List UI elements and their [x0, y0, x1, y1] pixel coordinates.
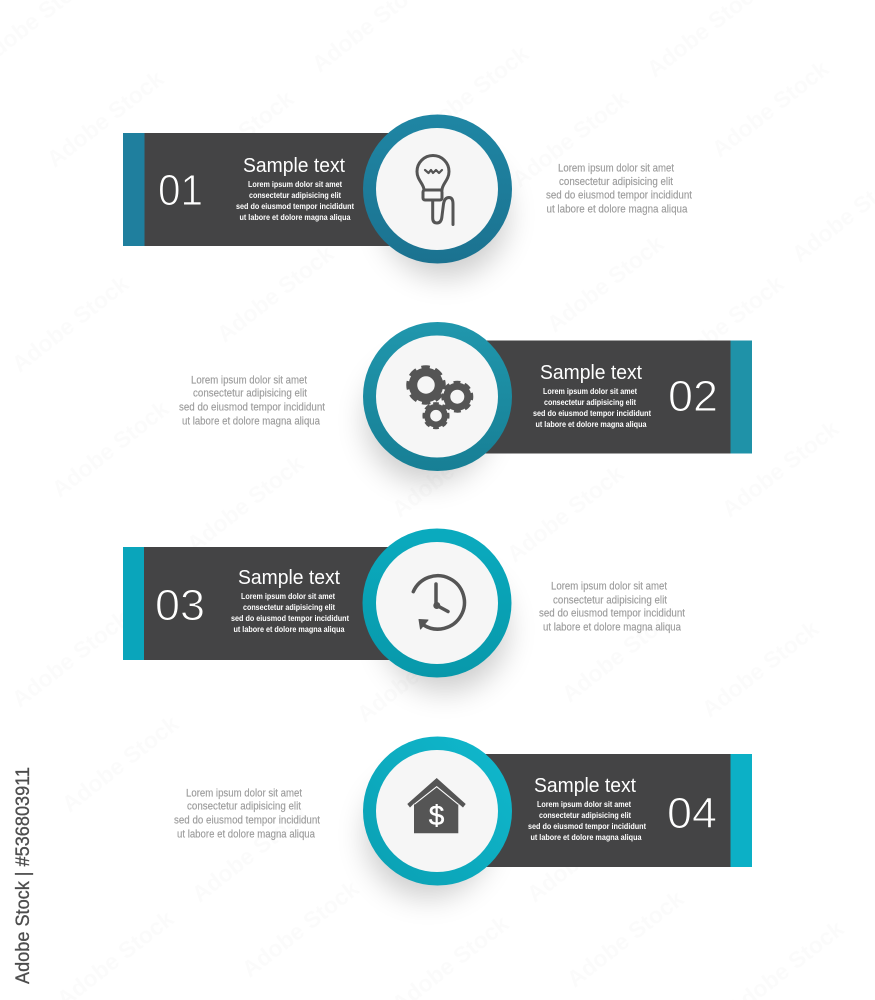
accent strip 04	[730, 754, 752, 867]
side text 03: consectetur adipisicing elit	[553, 594, 667, 606]
panel: step 04	[174, 736, 752, 897]
number 02: 02	[668, 372, 718, 421]
heading 02: Sample text	[540, 362, 642, 384]
infographic canvas: Adobe Stock	[387, 415, 514, 522]
icon: house with dollar	[407, 778, 466, 833]
accent strip 03	[123, 547, 144, 660]
bar text 01: ut labore et dolore magna aliqua	[240, 212, 351, 222]
bar 04	[482, 754, 731, 867]
side text 04: sed do eiusmod tempor incididunt	[174, 814, 320, 826]
infographic canvas: Adobe Stock	[717, 415, 844, 522]
accent strip 02	[730, 340, 752, 454]
stock id label: Adobe Stock | #536803911	[13, 767, 34, 984]
infographic canvas: Adobe Stock	[507, 85, 634, 192]
bar text 02: sed do eiusmod tempor incididunt	[533, 408, 651, 418]
icon: house with dollar: $	[429, 800, 445, 831]
side text 01: sed do eiusmod tempor incididunt	[546, 190, 692, 202]
number 04: 04	[667, 789, 717, 838]
infographic canvas: Adobe Stock	[542, 230, 669, 337]
inner disc 02	[376, 336, 498, 458]
infographic canvas: Adobe Stock	[7, 605, 134, 712]
bar text 03: consectetur adipisicing elit	[243, 602, 335, 612]
side text 01: consectetur adipisicing elit	[559, 176, 673, 188]
ring 04	[363, 736, 512, 886]
inner disc 01	[376, 128, 498, 250]
side text 03: sed do eiusmod tempor incididunt	[539, 608, 685, 620]
panel: step 01	[123, 114, 692, 277]
infographic canvas: Adobe Stock	[172, 85, 299, 192]
inner disc 03	[376, 542, 498, 664]
side text 02: consectetur adipisicing elit	[193, 388, 307, 400]
ring 01	[363, 114, 512, 264]
infographic canvas: Adobe Stock	[662, 270, 789, 377]
side text 04: ut labore et dolore magna aliqua	[177, 828, 315, 840]
heading 03: Sample text	[238, 567, 340, 589]
infographic canvas: Adobe Stock	[557, 600, 684, 707]
bar 02	[482, 340, 731, 454]
side text 04: Lorem ipsum dolor sit amet	[186, 788, 302, 800]
side text 04: consectetur adipisicing elit	[187, 800, 301, 812]
side text 01: Lorem ipsum dolor sit amet	[558, 162, 674, 174]
side text 02: ut labore et dolore magna aliqua	[182, 416, 320, 428]
infographic canvas: Adobe Stock	[522, 800, 649, 907]
bar text 04: sed do eiusmod tempor incididunt	[528, 821, 646, 831]
infographic canvas: Adobe Stock	[212, 240, 339, 347]
bar text 02: consectetur adipisicing elit	[544, 397, 636, 407]
panel: step 02	[179, 322, 752, 482]
infographic canvas: Adobe Stock	[707, 55, 834, 162]
bar text 03: ut labore et dolore magna aliqua	[234, 624, 345, 634]
bar text 01	[236, 179, 354, 222]
infographic canvas: Adobe Stock	[352, 620, 479, 727]
side text 01: ut labore et dolore magna aliqua	[546, 204, 688, 216]
number 01: 01	[158, 166, 203, 215]
panel: step 03	[123, 528, 685, 691]
side text 01	[546, 162, 692, 216]
bar text 01: Lorem ipsum dolor sit amet	[248, 179, 342, 189]
infographic canvas: Adobe Stock	[407, 40, 534, 147]
infographic canvas: Adobe Stock	[237, 875, 364, 982]
bar text 03: Lorem ipsum dolor sit amet	[241, 591, 335, 601]
number 03: 03	[155, 581, 205, 630]
infographic canvas: Adobe Stock	[187, 800, 314, 907]
bar 03	[144, 547, 394, 660]
inner disc 04	[376, 750, 498, 872]
side text 03: ut labore et dolore magna aliqua	[543, 622, 681, 634]
bar text 03	[231, 591, 349, 634]
side text 04	[174, 788, 320, 840]
bar text 02: Lorem ipsum dolor sit amet	[543, 386, 637, 396]
bar 01	[144, 133, 394, 246]
bar text 04	[528, 799, 646, 842]
infographic canvas: Adobe Stock	[697, 615, 824, 722]
bar text 04: Lorem ipsum dolor sit amet	[537, 799, 631, 809]
infographic canvas: Adobe Stock	[47, 395, 174, 502]
bar text 03: sed do eiusmod tempor incididunt	[231, 613, 349, 623]
bar text 01: sed do eiusmod tempor incididunt	[236, 201, 354, 211]
infographic canvas: Adobe Stock	[562, 885, 689, 992]
infographic canvas: Adobe Stock	[42, 65, 169, 172]
side text 03: Lorem ipsum dolor sit amet	[551, 580, 667, 592]
bar text 02: ut labore et dolore magna aliqua	[536, 419, 647, 429]
heading 01: Sample text	[243, 155, 345, 177]
bar text 04: consectetur adipisicing elit	[539, 810, 631, 820]
infographic canvas: Adobe Stock	[182, 450, 309, 557]
side text 02	[179, 374, 325, 428]
bar text 01: consectetur adipisicing elit	[249, 190, 341, 200]
ring 03	[362, 528, 512, 678]
heading 04: Sample text	[534, 775, 636, 797]
ring 02	[363, 322, 512, 471]
accent strip 01	[123, 133, 144, 246]
bar text 04: ut labore et dolore magna aliqua	[530, 832, 642, 842]
icon: gears	[408, 368, 471, 428]
icon: clock	[413, 576, 464, 629]
infographic canvas: Adobe Stock	[502, 460, 629, 567]
infographic canvas: Adobe Stock	[57, 710, 184, 817]
infographic canvas: Adobe Stock	[7, 270, 134, 377]
side text 02: Lorem ipsum dolor sit amet	[191, 374, 307, 386]
side text 03	[539, 580, 685, 634]
icon: light bulb	[417, 156, 453, 224]
bar text 02	[533, 386, 651, 429]
side text 02: sed do eiusmod tempor incididunt	[179, 402, 325, 414]
